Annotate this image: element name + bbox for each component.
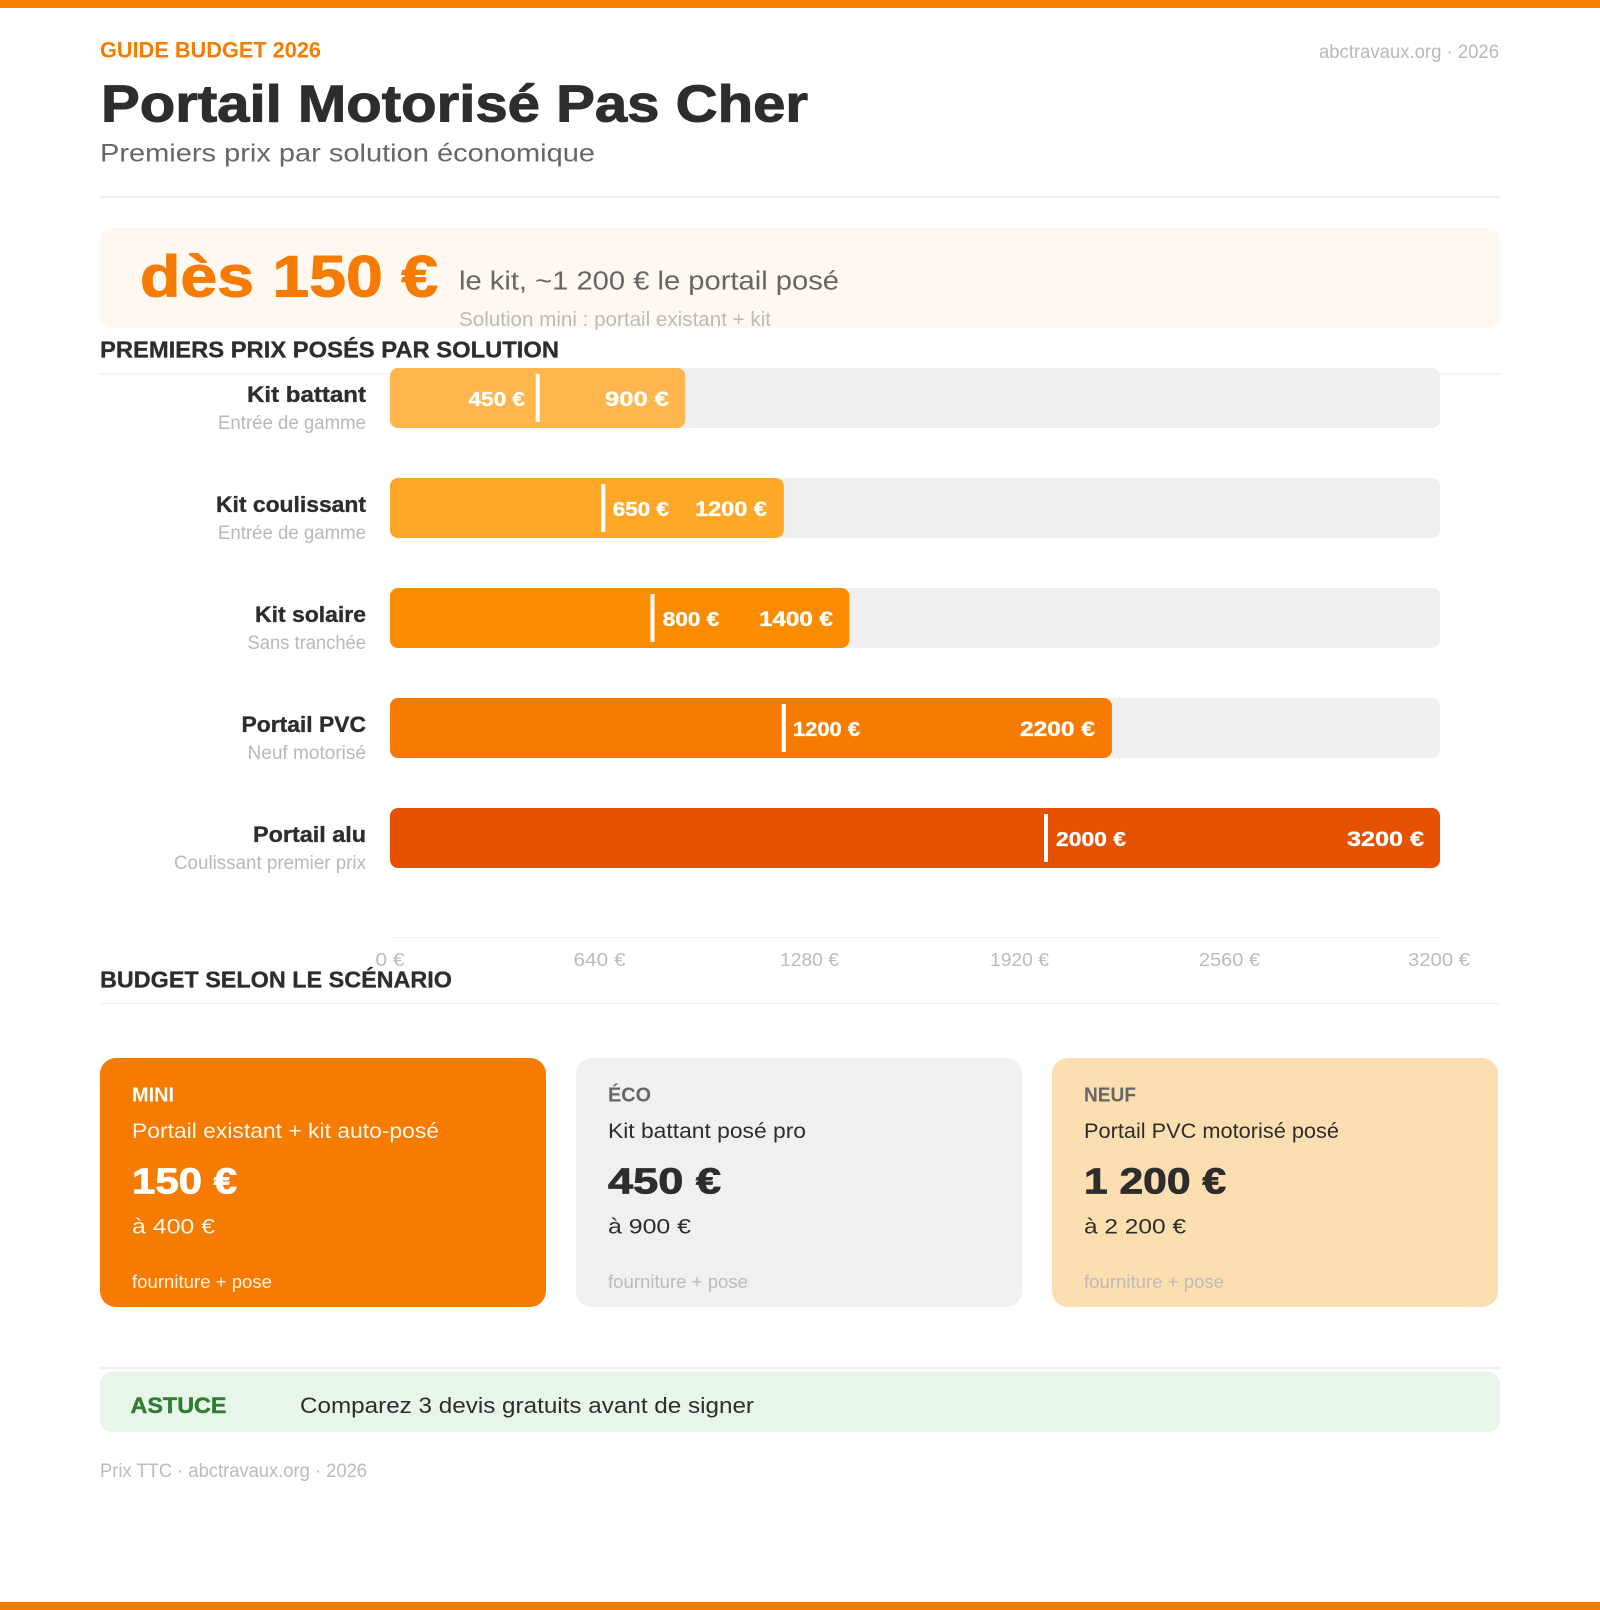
row: kit battant: Kit battant — [247, 382, 367, 407]
row: kit coulissant: Entrée de gamme — [218, 523, 366, 544]
heading: budget selon le scenario: BUDGET SELON LE SCÉNARIO — [100, 966, 452, 992]
row: portail alu: 2000 € — [1056, 829, 1126, 851]
card: neuf — [1052, 1058, 1498, 1307]
row: portail pvc: 2200 € — [1020, 717, 1095, 741]
title: Portail Motorisé Pas Cher — [101, 76, 808, 134]
panel: hero callout — [100, 228, 1500, 331]
row: kit battant — [218, 368, 1440, 434]
row: kit battant: 900 € — [605, 387, 669, 411]
row: portail pvc: 1200 € — [793, 719, 860, 741]
card: mini: MINI — [132, 1085, 174, 1107]
row: portail alu: Coulissant premier prix — [174, 853, 366, 874]
row: kit battant: 450 € — [468, 389, 525, 411]
card: mini: fourniture + pose — [132, 1271, 272, 1292]
row: kit coulissant — [216, 478, 1440, 544]
card: mini: 150 € — [132, 1160, 237, 1202]
axis: 2560 € — [1199, 950, 1260, 970]
card: mini: Portail existant + kit auto-posé — [132, 1120, 439, 1143]
row: kit solaire: Sans tranchée — [248, 633, 366, 654]
row: portail pvc — [242, 698, 1440, 764]
bar chart: premiers prix — [174, 368, 1470, 970]
card: neuf: 1 200 € — [1084, 1160, 1226, 1202]
row: portail alu — [174, 808, 1440, 874]
card: eco: Kit battant posé pro — [608, 1120, 806, 1143]
subtitle: Premiers prix par solution économique — [100, 140, 595, 168]
row: kit battant: Entrée de gamme — [218, 413, 366, 434]
row: kit coulissant: 1200 € — [695, 497, 767, 521]
tip label: ASTUCE — [130, 1393, 226, 1418]
axis — [376, 937, 1470, 970]
card: eco: 450 € — [608, 1160, 721, 1202]
card: mini: à 400 € — [132, 1216, 215, 1238]
card: neuf: fourniture + pose — [1084, 1271, 1224, 1292]
axis: 1920 € — [990, 950, 1049, 970]
row: portail alu: Portail alu — [253, 822, 366, 847]
eyebrow: guide budget: GUIDE BUDGET 2026 — [100, 38, 321, 62]
row: kit solaire — [248, 588, 1440, 654]
panel: tip — [100, 1372, 1500, 1432]
card: eco — [576, 1058, 1022, 1307]
row: kit solaire: 800 € — [663, 609, 719, 631]
row: kit solaire: Kit solaire — [255, 602, 366, 627]
row: portail pvc: Portail PVC — [242, 712, 366, 737]
row: kit coulissant: 650 € — [613, 499, 669, 521]
hero note: Solution mini : portail existant + kit — [459, 309, 771, 331]
axis: 0 € — [376, 950, 404, 970]
card: eco: à 900 € — [608, 1216, 691, 1238]
axis: 1280 € — [780, 950, 839, 970]
footer note: Prix TTC · abctravaux.org · 2026 — [100, 1461, 367, 1482]
heading: premiers prix: PREMIERS PRIX POSÉS PAR SOLUTION — [100, 336, 559, 362]
top accent bar — [0, 0, 1600, 8]
card: neuf: à 2 200 € — [1084, 1216, 1186, 1238]
bottom accent bar — [0, 1602, 1600, 1610]
row: portail pvc: Neuf motorisé — [248, 743, 366, 764]
row: portail alu: 3200 € — [1347, 827, 1424, 851]
source note top right: abctravaux.org · 2026 — [1319, 42, 1499, 63]
row: kit solaire: 1400 € — [759, 607, 833, 631]
card: mini — [100, 1058, 546, 1307]
axis: 640 € — [574, 950, 626, 970]
card: eco: fourniture + pose — [608, 1271, 748, 1292]
row: kit coulissant: Kit coulissant — [216, 492, 367, 517]
hero description: le kit, ~1 200 € le portail posé — [459, 268, 839, 296]
card: neuf: NEUF — [1084, 1085, 1136, 1107]
tip text: Comparez 3 devis gratuits avant de signer — [300, 1393, 754, 1418]
card: neuf: Portail PVC motorisé posé — [1084, 1120, 1339, 1143]
hero price: dès 150 € — [140, 244, 438, 310]
axis: 3200 € — [1408, 950, 1470, 970]
card: eco: ÉCO — [608, 1084, 651, 1107]
